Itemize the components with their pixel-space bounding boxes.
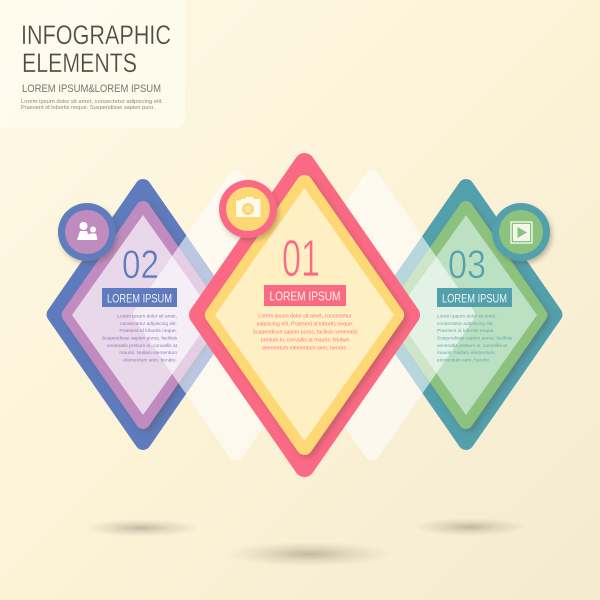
body text 03 [437,314,513,364]
number 01: 01 [282,230,320,288]
diamond 01 shapes [199,163,410,467]
body text 02: elementum sem, hendre. [123,358,177,364]
body text 01: elementum elementum sem, hendre. [262,346,348,352]
subtitle: LOREM IPSUM&LOREM IPSUM [22,83,161,95]
body text 03: Praesent id lobortis neque. [437,328,495,334]
title [21,20,171,78]
body text 03: Lorem ipsum dolor sit amet, [437,314,497,320]
number 03: 03 [448,243,486,287]
panel 03 content [437,243,513,364]
title: INFOGRAPHIC [21,20,171,50]
ground shadow right [414,518,526,536]
panel 01 content [252,230,358,352]
diamond 03 shapes [378,187,554,442]
panel 02 content [102,243,178,364]
translucent diamond right [277,178,467,452]
header panel [0,0,185,128]
icon: play badge [492,203,550,261]
ground shadow left [83,519,199,537]
body text 02: Praesent id lobortis neque. [119,328,177,334]
body text 02 [102,314,178,364]
body text 02: Suspendisse sapien purus, facilisis [102,336,178,342]
body text 02: mauris. Nullam elementum [119,350,177,356]
translucent diamond left [141,178,331,452]
header body text: Lorem ipsum dolor sit amet, consectetur adipiscing elit. [21,99,163,105]
body text 03: venenatis pretium in, convallis at [437,343,508,349]
body text 03: consectetur adipiscing elit. [437,321,494,327]
header body text: Praesent id lobortis neque. Suspendisse sapien puru. [21,105,155,111]
body text 02: Lorem ipsum dolor sit amet, [117,314,177,320]
number 02: 02 [122,243,159,287]
body text 02: venenatis pretium in, convallis at [107,343,178,349]
label 03: LOREM IPSUM [442,292,507,306]
label 02: LOREM IPSUM [107,292,172,306]
body text 03: elementum sem, hendre. [437,358,491,364]
icon: camera badge [219,180,277,238]
body text 01: adipiscing elit. Praesent id lobortis neque. [257,322,353,328]
body text 03: mauris. Nullam elementum [437,350,495,356]
ground shadow center [227,542,391,566]
body text 02: consectetur adipiscing elit. [120,321,177,327]
title: ELEMENTS [22,48,137,78]
body text 03: Suspendisse sapien purus, facilisis [437,336,513,342]
header body text [21,99,163,111]
icon: people badge [58,203,116,261]
body text 01: pretium in, convallis at mauris. Nullam [261,338,350,344]
body text 01: Lorem ipsum dolor sit amet, consectetur [258,314,352,320]
label 01: LOREM IPSUM [270,288,340,304]
diamond 02 shapes [54,187,232,442]
body text 01 [252,314,358,352]
body text 01: Suspendisse sapien purus, facilisis venenatis [252,330,358,336]
